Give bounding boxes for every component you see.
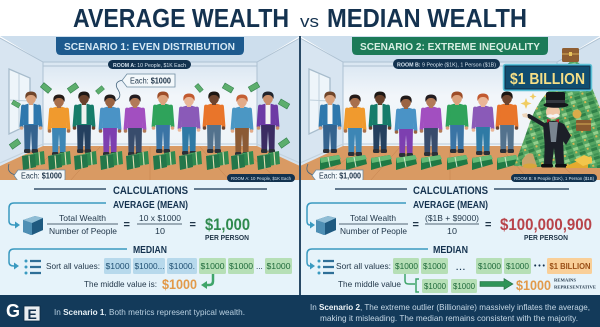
icon: sorted list [318,260,334,274]
gold bars [566,155,592,168]
title: vs [300,12,319,31]
flat money stacks [320,155,518,170]
room A lower label [227,174,295,182]
middle value result [84,276,197,292]
mean fraction: Total Wealth [350,213,396,223]
average connector arrow [307,203,406,228]
callout: each $1000: Each: $1000 [21,172,62,180]
median heading: MEDIAN [433,245,468,256]
mean fraction [47,213,196,236]
nine ordinary people [319,92,518,157]
middle value result: $1000 [162,276,197,292]
sort all values row: ... [456,263,465,272]
panel divider [299,36,301,295]
sort all values row [46,258,292,274]
mean fraction: Number of People [340,226,407,236]
calculations heading: CALCULATIONS [413,185,488,197]
median result: REMAINS [554,278,577,282]
two middle values: $1000 [453,282,475,291]
median result: REPRESENTATIVE [554,284,596,290]
mean fraction: = [412,219,419,231]
middle value label: The middle value [338,279,401,289]
money stacks [22,151,280,170]
mean fraction: = [190,219,196,231]
mean fraction: = [485,219,491,231]
sort all values row: $1000 [266,262,291,271]
sort all values row: Sort all values: [336,262,391,271]
sort all values row: $1000 [395,262,418,271]
billionaire money pile [514,60,600,168]
sort all values row: $1000 [229,262,253,271]
sort all values row: $1000 [423,262,446,271]
panel: scenario 2 calculations [300,174,600,295]
room A label [108,60,191,69]
footer note 2: making it misleading. The median remains consistent with the majority. [320,313,578,323]
median connector arrow [9,249,127,270]
mean fraction: = [124,219,130,231]
callout: each person has $1000: Each: $1000 [130,76,171,86]
average heading: AVERAGE (MEAN) [113,200,188,211]
mean fraction: 10 [155,226,165,236]
footer note 1: In Scenario 1, Both metrics represent typical wealth. [54,307,245,317]
scenario 1 banner [56,37,244,55]
median result: $1000 [516,277,551,293]
sort all values row [336,258,592,274]
$1 billion sign: $1 BILLION [510,71,585,88]
sort all values row: $1000 [200,262,225,271]
two middle values: $1000 [424,282,446,291]
mean result: PER PERSON [524,233,568,242]
scenario 2 banner [352,37,548,55]
mean result [500,215,592,242]
logo: G [6,301,20,321]
room A label: ROOM A: 10 People, $1K Each [113,63,186,69]
scenario 2 banner: SCENARIO 2: EXTREME INEQUALITY [360,41,540,53]
sort all values row: $1 BILLION [550,262,591,271]
arrow to median result [480,278,513,290]
panel: scenario 1 calculations [0,174,300,295]
room A lower label: ROOM A: 10 People, $1K Each [231,176,291,182]
sort all values row: $1000. [169,262,195,271]
mean fraction: ($1B + $9000) [425,213,479,223]
icon: sorted list [24,260,41,274]
scenario 1 banner: SCENARIO 1: EVEN DISTRIBUTION [64,41,235,53]
median connector arrow [307,249,428,270]
median heading: MEDIAN [133,245,167,256]
title [73,5,527,33]
icon: money cube [316,216,336,235]
panel: scenario 2 room [300,36,600,181]
mean fraction: Number of People [49,226,117,236]
mean fraction: 10 x $1000 [139,213,181,223]
average heading: AVERAGE (MEAN) [413,200,488,211]
mean fraction: 10 [447,226,457,236]
mean fraction [339,213,491,236]
$1 billion sign [504,64,592,90]
room B lower label [511,174,597,182]
sort all values row: $1000 [506,262,529,271]
room B label [393,59,500,69]
sort all values row: $1000... [134,262,164,271]
callout: each $1,000: Each: $1,000 [319,172,361,180]
average connector arrow [9,203,106,228]
mean fraction: Total Wealth [59,213,106,223]
footer right [300,295,600,327]
people: ten people standing on equal money stacks [20,92,279,156]
mean result: $1,000 [205,215,250,234]
floating banknotes [9,82,290,149]
logo: E [28,306,37,322]
logo [6,301,40,322]
callout: each $1000 [8,164,65,181]
arrow from middle value [201,274,213,289]
median result [516,277,596,293]
callout: each person has $1000 [114,74,175,101]
icon: money cube [23,216,43,235]
bracket to middle values [405,274,419,292]
sparkles [520,93,536,109]
room B label: ROOM B: 9 People ($1K), 1 Person ($1B) [397,62,496,68]
mean result [205,215,250,242]
footer left [0,295,300,327]
panel: scenario 1 room [0,36,300,181]
treasure chest [562,48,579,62]
title: AVERAGE WEALTH [73,5,289,33]
title: MEDIAN WEALTH [327,5,527,33]
footer note 2: In Scenario 2, The extreme outlier (Billionaire) massively inflates the average, [310,302,596,312]
mean result: PER PERSON [205,233,249,242]
sort all values row: ••• [534,263,546,270]
sort all values row: Sort all values: [46,262,100,271]
calculations heading: CALCULATIONS [113,185,188,197]
sort all values row: $1000 [106,262,130,271]
sort all values row: ... [256,262,263,271]
two middle values [422,279,477,293]
callout: each $1,000 [307,164,363,181]
middle value result: The middle value is: [84,279,157,289]
billionaire figure with top hat [522,92,571,168]
sort all values row: $1000 [478,262,501,271]
